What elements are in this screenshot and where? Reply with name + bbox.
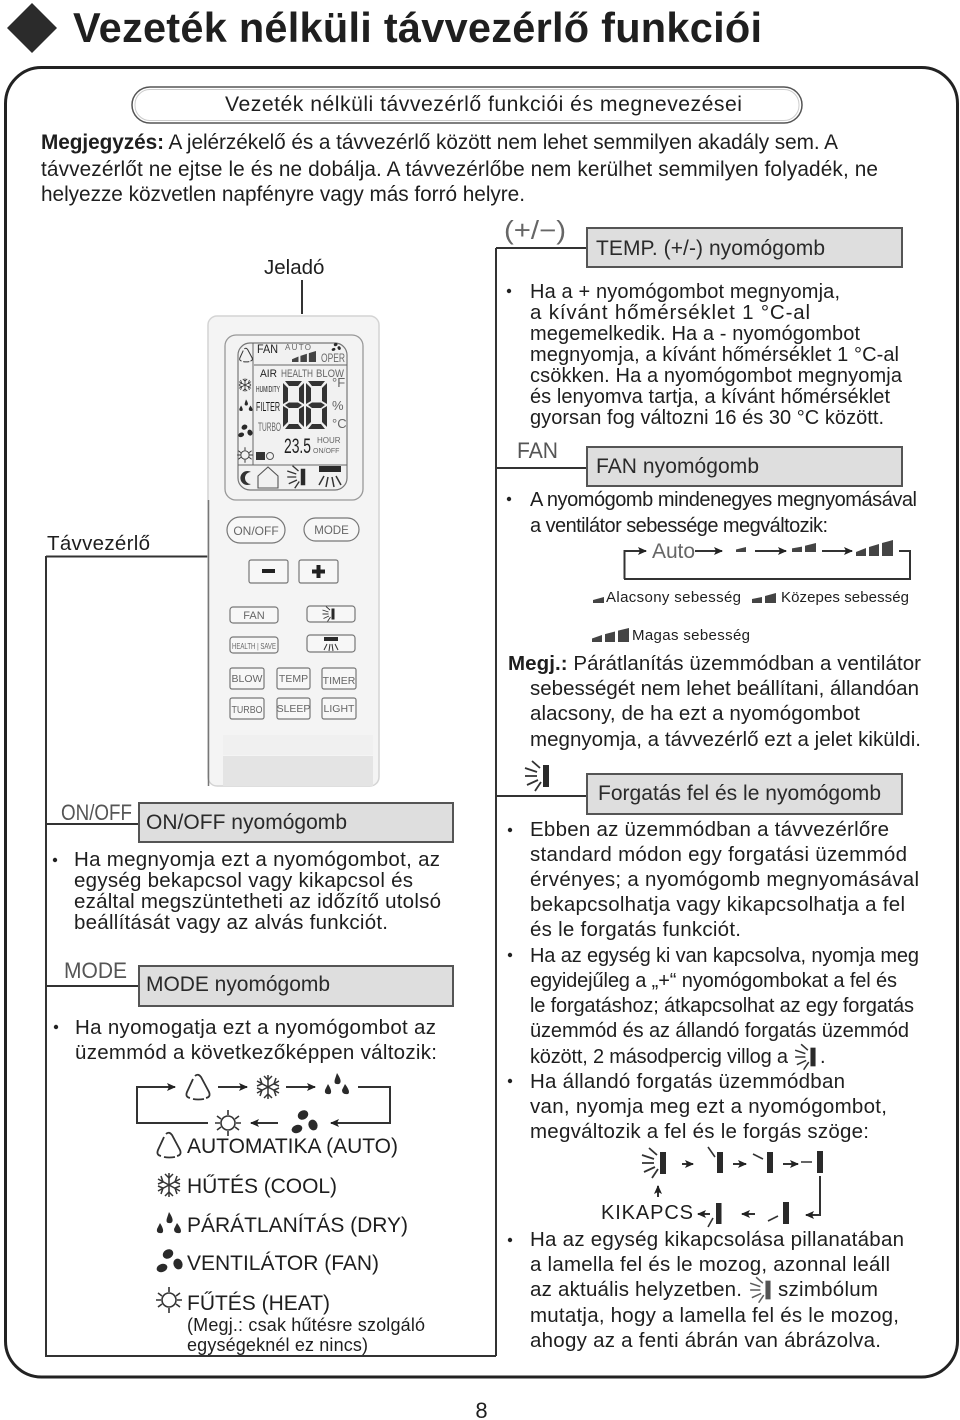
diagram: fan speed cycle: Auto — [652, 540, 695, 563]
LCD display: AIR — [260, 368, 277, 380]
text: swing off description: szimbólum — [778, 1278, 878, 1301]
ON/OFF button: ON/OFF — [233, 524, 279, 538]
text: ON/OFF description: egység bekapcsol vagy kikapcsol és — [74, 869, 413, 892]
plus button — [299, 560, 338, 583]
diagram: louver swing cycle — [601, 1147, 823, 1227]
LCD display: ON/OFF — [313, 448, 339, 455]
text: TEMP description — [507, 281, 903, 429]
mode: heat note — [187, 1315, 425, 1355]
LCD display: FAN — [257, 342, 278, 356]
text: MODE description: üzemmód a következőképpen változik: — [75, 1041, 437, 1064]
text: swing description: üzemmód és az állandó forgatás üzemmód — [530, 1020, 909, 1042]
list: modes — [155, 1133, 425, 1355]
heading: ON/OFF — [139, 803, 453, 842]
text: FAN description — [507, 489, 917, 537]
text: FAN description: a ventilátor sebessége megváltozik: — [530, 515, 828, 537]
text: FAN description: A nyomógomb mindenegyes megnyomásával — [530, 489, 917, 511]
text: FAN note: megnyomja, a távvezérlő ezt a jelet kiküldi. — [530, 728, 921, 751]
MODE button: MODE — [314, 525, 349, 537]
mode: auto: AUTOMATIKA (AUTO) — [187, 1135, 398, 1158]
LCD display: TURBO — [258, 420, 281, 434]
diagram: fan speed cycle — [624, 540, 910, 579]
heading: swing — [587, 774, 902, 814]
LCD display: BLOW — [316, 368, 345, 380]
function buttons: TEMP — [279, 673, 308, 685]
heading: TEMP: TEMP. (+/-) nyomógomb — [596, 237, 825, 260]
heading: FAN: FAN nyomógomb — [596, 455, 759, 478]
panel: ON/OFF button — [53, 800, 453, 934]
text: swing description: Ha állandó forgatás üzemmódban — [530, 1070, 845, 1093]
text: swing off description: mutatja, hogy a lamella fel és le mozog, — [530, 1304, 899, 1327]
heading: FAN — [587, 447, 902, 486]
text: swing description: Ebben az üzemmódban a távvezérlőre — [530, 818, 889, 841]
note paragraph: Megjegyzés: A jelérzékelő és a távvezérlő között nem lehet semmilyen akadály sem. A — [41, 131, 838, 154]
mode: heat — [156, 1287, 330, 1315]
horizontal swing button — [307, 635, 355, 652]
text: swing description: van, nyomja meg ezt a nyomógombot, — [530, 1095, 887, 1118]
LCD display: OPER — [321, 351, 345, 365]
heading: ON/OFF: ON/OFF nyomógomb — [146, 811, 347, 834]
FAN button — [230, 607, 278, 623]
minus button — [249, 560, 288, 583]
text: swing description: bekapcsolhatja vagy kikapcsolhatja a fel — [530, 893, 905, 916]
text: ON/OFF description: ezáltal megszüntetheti az időzítő utolsó — [74, 890, 441, 913]
panel: FAN button — [507, 438, 921, 751]
label: MODE: MODE — [64, 958, 127, 983]
FAN button: FAN — [243, 610, 265, 622]
LCD display — [225, 335, 363, 500]
text: ON/OFF description: beállítását vagy az alvás funkciót. — [74, 911, 388, 934]
mode: heat note: egységeknél ez nincs) — [187, 1335, 368, 1355]
function buttons: LIGHT — [324, 703, 355, 715]
label: Jeladó with leader — [264, 256, 324, 314]
label: Jeladó with leader: Jeladó — [264, 256, 324, 279]
icon: swing — [525, 761, 549, 791]
text: swing off description: az aktuális helyzetben. — [530, 1278, 742, 1301]
LCD display: °C — [332, 416, 347, 431]
text: swing description: megváltozik a fel és le forgás szöge: — [530, 1120, 869, 1143]
text: TEMP description: Ha a + nyomógombot megnyomja, — [530, 281, 840, 303]
text: TEMP description: a kívánt hőmérséklet 1 °C-al — [530, 301, 810, 324]
text: swing off description: Ha az egység kikapcsolása pillanatában — [530, 1228, 904, 1251]
HEALTH SAVE button: HEALTH | SAVE — [232, 641, 276, 651]
note paragraph: helyezze közvetlen napfényre vagy más forró helyre. — [41, 183, 525, 206]
heading: swing: Forgatás fel és le nyomógomb — [598, 782, 881, 805]
legend: medium speed: Közepes sebesség — [781, 589, 909, 606]
function buttons — [230, 668, 356, 719]
text: FAN note: sebességét nem lehet beállítani, állandóan — [530, 677, 919, 700]
title: Vezeték nélküli távvezérlő funkciói — [73, 4, 762, 51]
HEALTH SAVE button — [230, 637, 278, 653]
label: ON/OFF: ON/OFF — [61, 800, 132, 825]
diagram: louver swing cycle: KIKAPCS — [601, 1202, 693, 1224]
text: TEMP description: megnyomja, a kívánt hőmérséklet 1 °C-al — [530, 344, 899, 366]
LCD display: % — [332, 398, 344, 413]
legend: low speed: Alacsony sebesség — [606, 589, 741, 606]
label: Távvezérlő with leader: Távvezérlő — [47, 532, 150, 555]
mode: heat: FŰTÉS (HEAT) — [187, 1292, 330, 1315]
text: swing off description: ahogy az a fenti ábrán van ábrázolva. — [530, 1329, 881, 1352]
text: swing description: egyidejűleg a „+“ nyomógombokat a fel és — [530, 970, 897, 992]
LCD display: HUMIDITY — [256, 385, 280, 394]
note paragraph — [41, 131, 878, 206]
text: ON/OFF description — [53, 848, 441, 934]
MODE button — [304, 518, 359, 541]
mode: dry: PÁRÁTLANÍTÁS (DRY) — [187, 1214, 408, 1237]
text: TEMP description: megemelkedik. Ha a - nyomógombot — [530, 323, 860, 345]
ON/OFF button — [227, 517, 285, 543]
text: swing off description — [508, 1228, 904, 1352]
label: FAN: FAN — [517, 438, 558, 463]
text: swing description: érvényes; a nyomógomb megnyomásával — [530, 868, 919, 891]
icon: title diamond — [7, 3, 57, 53]
heading: MODE: MODE nyomógomb — [146, 973, 330, 996]
function buttons: BLOW — [232, 673, 263, 685]
heading: MODE — [139, 966, 453, 1006]
label: (+/-): (+/−) — [504, 215, 566, 245]
LCD display: 23.5 — [284, 435, 311, 458]
mode: heat note: (Megj.: csak hűtésre szolgáló — [187, 1315, 425, 1335]
text: MODE description — [54, 1016, 437, 1064]
text: ON/OFF description: Ha megnyomja ezt a nyomógombot, az — [74, 848, 440, 871]
text: swing description — [508, 818, 919, 1143]
LCD display: °F — [332, 375, 345, 390]
LCD display: AUTO — [285, 343, 311, 352]
text: TEMP description: gyorsan fog változni 16 és 30 °C között. — [530, 407, 884, 429]
section frame lines — [46, 248, 587, 1356]
header pill: Vezeték nélküli távvezérlő funkciói és megnevezései — [225, 93, 742, 116]
function buttons: TIMER — [323, 675, 356, 687]
text: FAN note: alacsony, de ha ezt a nyomógombot — [530, 702, 860, 725]
text: TEMP description: és lenyomva tartja, a kívánt hőmérséklet — [530, 386, 890, 408]
legend: high speed: Magas sebesség — [632, 627, 750, 644]
LCD display: HEALTH — [281, 368, 313, 380]
panel: swing button — [508, 761, 919, 1352]
heading: TEMP — [587, 228, 902, 267]
LCD display: FILTER — [256, 399, 280, 414]
function buttons: TURBO — [232, 704, 262, 716]
text: swing off description: a lamella fel és le mozog, azonnal leáll — [530, 1253, 890, 1276]
text: swing description: és le forgatás funkciót. — [530, 918, 741, 941]
function buttons: SLEEP — [277, 703, 310, 715]
diagram: mode cycle — [137, 1073, 390, 1136]
text: TEMP description: csökken. Ha a nyomógombot megnyomja — [530, 365, 903, 387]
swing button — [307, 606, 355, 622]
text: swing description: standard módon egy forgatási üzemmód — [530, 843, 907, 866]
text: swing description: Ha az egység ki van kapcsolva, nyomja meg — [530, 945, 919, 967]
LCD display: HOUR — [317, 436, 341, 445]
text: FAN note: Megj.: Párátlanítás üzemmódban a ventilátor — [508, 652, 921, 675]
mode: cool: HŰTÉS (COOL) — [187, 1175, 337, 1198]
text: swing description: . — [820, 1046, 826, 1068]
note paragraph: távvezérlőt ne ejtse le és ne dobálja. A távvezérlőbe nem kerülhet semmilyen folyadék, ne — [41, 158, 878, 181]
text: swing description: között, 2 másodpercig villog a — [530, 1046, 789, 1068]
header pill — [132, 87, 802, 123]
mode: fan: VENTILÁTOR (FAN) — [187, 1252, 379, 1275]
text: FAN note — [508, 652, 921, 751]
text: swing description: le forgatáshoz; átkapcsolhat az egy forgatás — [530, 995, 914, 1017]
panel: MODE button — [54, 958, 453, 1355]
remote control — [208, 316, 379, 786]
text: MODE description: Ha nyomogatja ezt a nyomógombot az — [75, 1016, 436, 1039]
panel: TEMP button — [504, 215, 903, 429]
remote body — [208, 316, 379, 786]
